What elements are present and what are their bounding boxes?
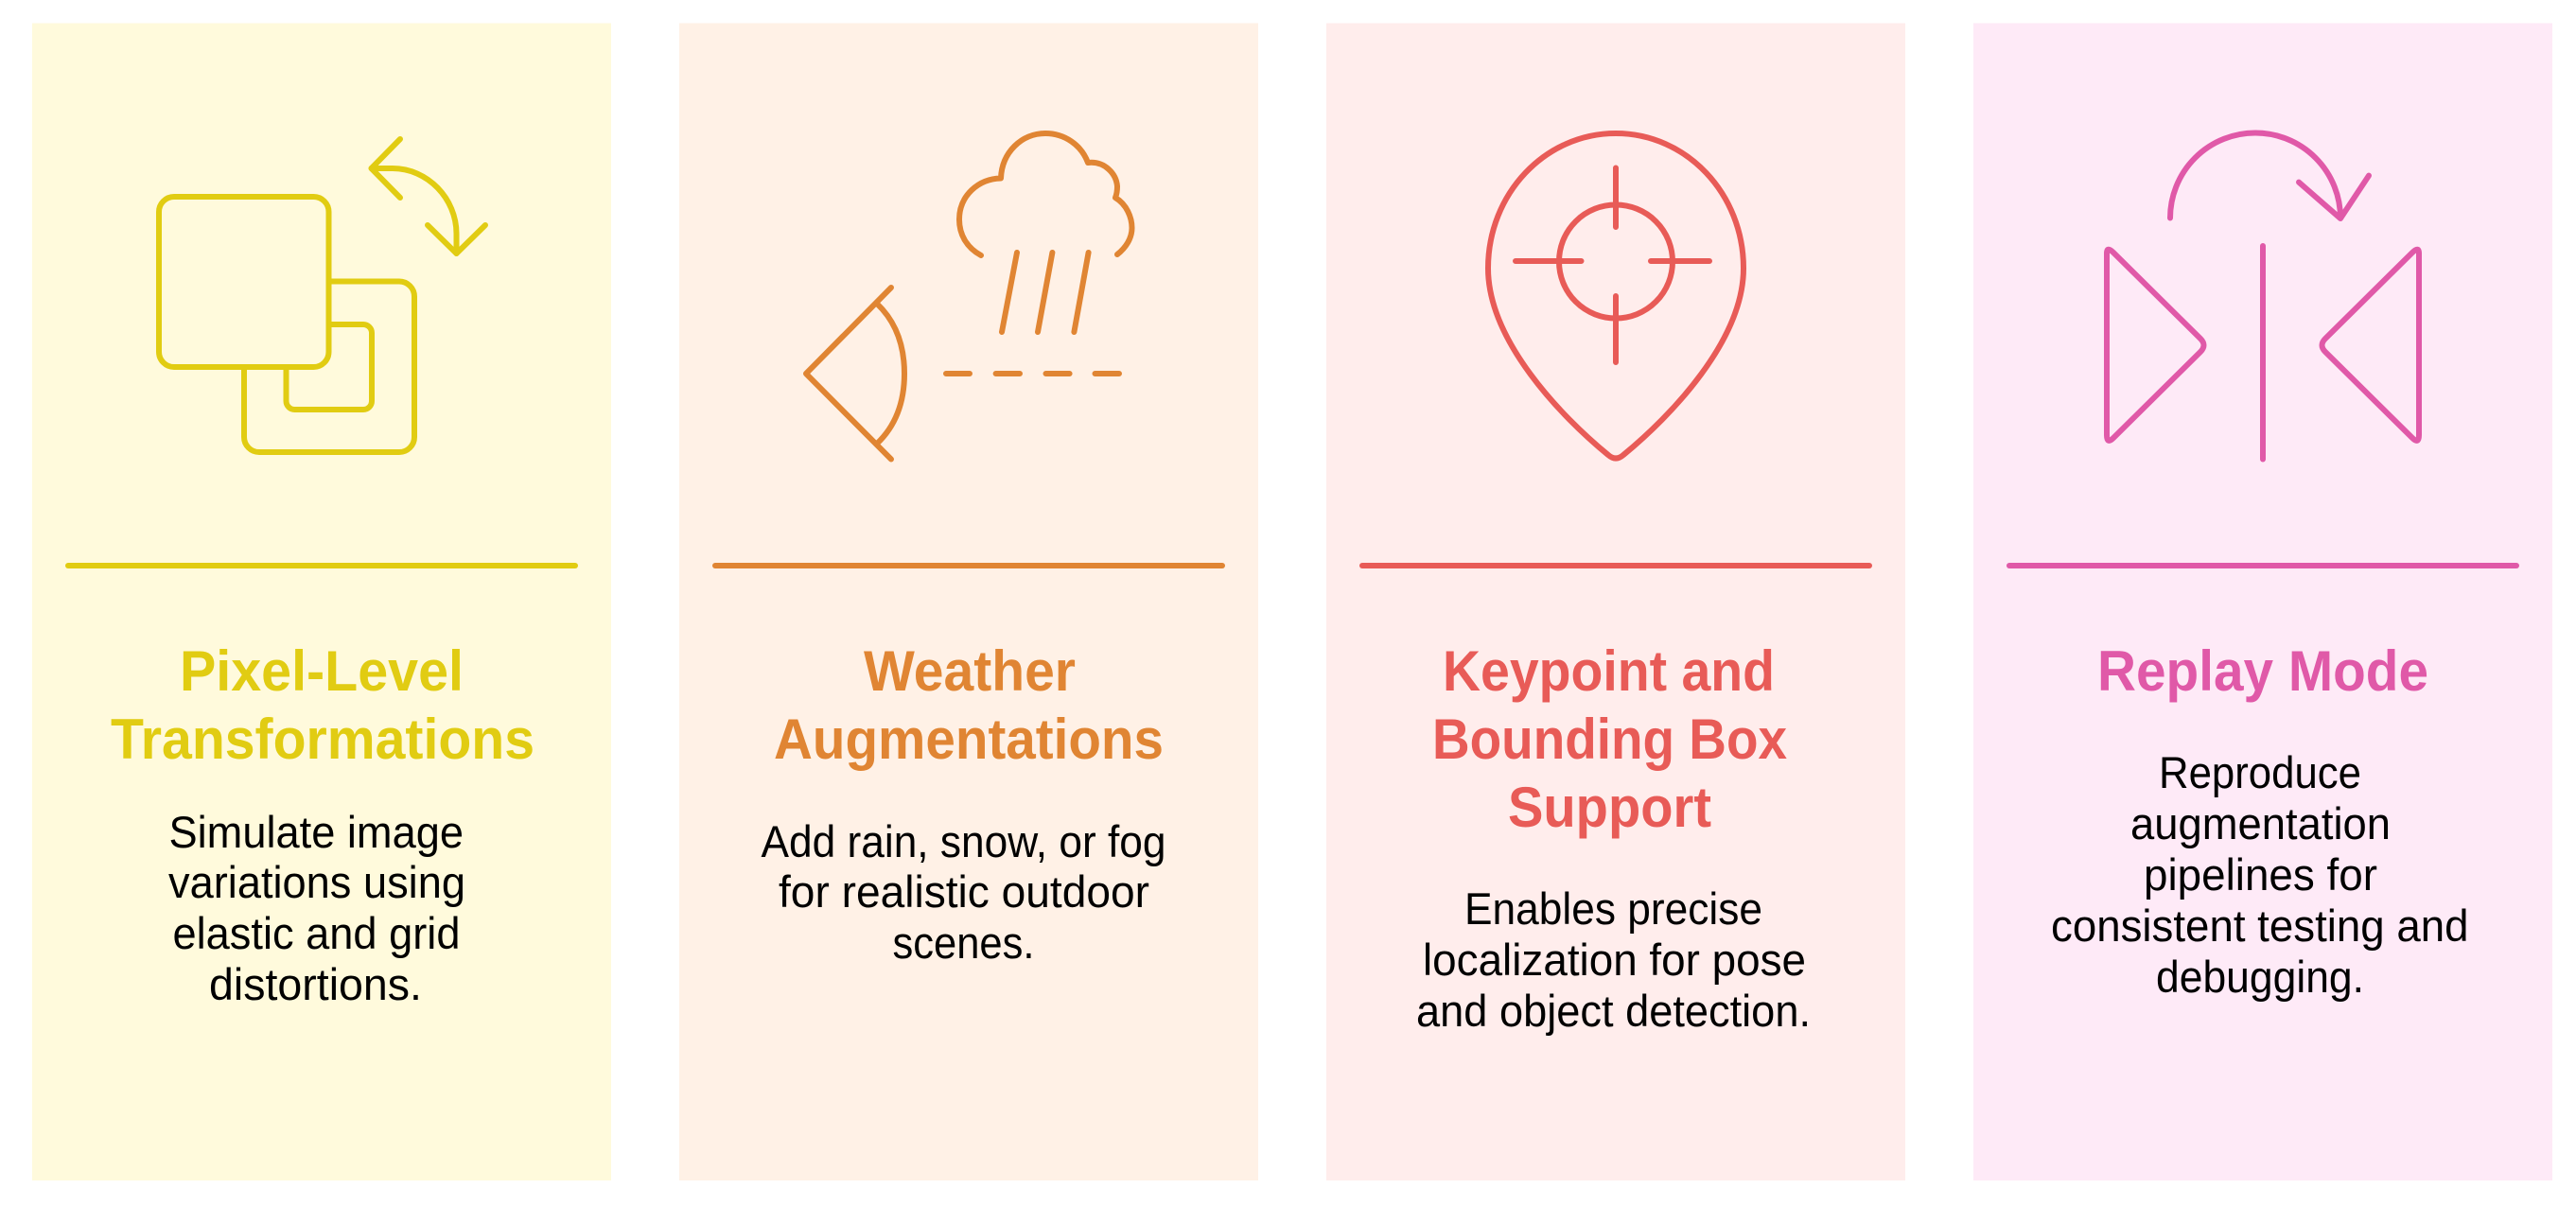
description text: [761, 816, 1165, 968]
description text: debugging.: [2156, 952, 2364, 1002]
panel: weather augmentations: [679, 23, 1258, 1180]
description text: augmentation: [2130, 798, 2391, 848]
panel: pixel-level transformations: [32, 23, 611, 1180]
heading: [1432, 639, 1787, 839]
heading: Bounding Box: [1432, 708, 1787, 771]
icon: location pin with crosshair: [1488, 133, 1744, 458]
heading: Keypoint and: [1443, 639, 1775, 703]
description text: variations using: [168, 857, 465, 907]
heading: Augmentations: [774, 708, 1164, 771]
divider line: [715, 563, 1222, 568]
description text: for realistic outdoor: [779, 866, 1149, 917]
description text: [1416, 883, 1811, 1036]
description text: Add rain, snow, or fog: [761, 816, 1165, 866]
panel background: [32, 23, 611, 1180]
divider line: [68, 563, 575, 568]
panel background: [1973, 23, 2552, 1180]
description text: localization for pose: [1423, 935, 1806, 985]
divider line: [2009, 563, 2516, 568]
divider line: [1362, 563, 1869, 568]
panel: keypoint and bounding box support: [1326, 23, 1905, 1180]
icon: eye viewing rain cloud: [806, 133, 1131, 460]
panel: replay mode: [1973, 23, 2552, 1180]
heading: Transformations: [111, 708, 534, 771]
heading: [774, 639, 1164, 771]
heading: Pixel-Level: [180, 639, 464, 703]
panel background: [1326, 23, 1905, 1180]
description text: [168, 807, 465, 1009]
description text: elastic and grid: [172, 908, 460, 958]
description text: distortions.: [209, 959, 422, 1009]
description text: [2051, 747, 2469, 1002]
description text: Enables precise: [1464, 883, 1762, 934]
description text: Simulate image: [168, 807, 464, 857]
description text: Reproduce: [2159, 747, 2361, 797]
icon: mirrored triangles with replay arrow: [2107, 133, 2419, 460]
heading: Support: [1508, 776, 1711, 839]
panel background: [679, 23, 1258, 1180]
description text: pipelines for: [2144, 849, 2377, 900]
description text: consistent testing and: [2051, 900, 2469, 951]
heading: Weather: [864, 639, 1076, 703]
description text: scenes.: [893, 918, 1035, 968]
heading: Replay Mode: [2097, 639, 2428, 703]
description text: and object detection.: [1416, 986, 1811, 1036]
icon: overlapping squares with rotation arrow: [159, 139, 485, 452]
heading: [111, 639, 534, 771]
